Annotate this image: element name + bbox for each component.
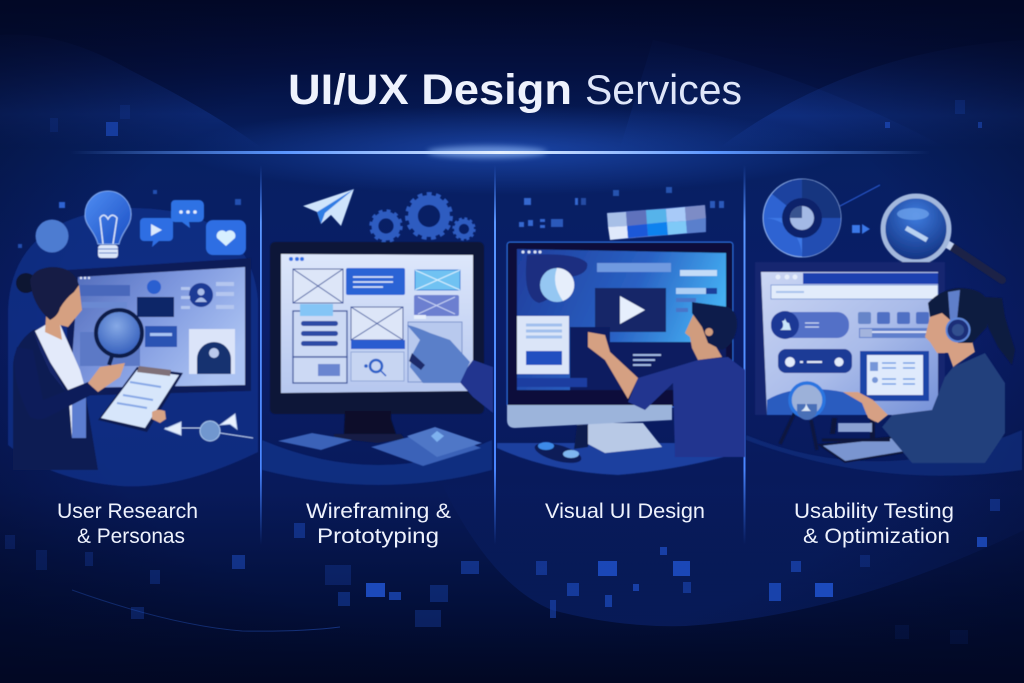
decorative squares: [519, 187, 724, 228]
desk items: [278, 433, 352, 450]
panel: user research & personas: [8, 190, 258, 486]
panel: visual ui design: [497, 187, 745, 475]
stand: [574, 425, 591, 449]
label: wireframing & prototyping: [306, 500, 451, 548]
stand: [344, 411, 396, 434]
icon: tripod magnifier: [780, 383, 824, 450]
horizontal glow line: [70, 146, 930, 158]
label: user research & personas: User Research: [57, 500, 198, 523]
desk: [497, 443, 742, 475]
desk: [262, 440, 492, 485]
icon: chat bubble: [171, 200, 204, 228]
wireframe blocks: [293, 269, 462, 383]
icon: magnifier: [883, 196, 1002, 280]
icon: light bulb: [85, 191, 131, 258]
icon: grey circle: [36, 220, 68, 252]
person: researcher: [13, 267, 125, 470]
hand pointing: [407, 325, 493, 413]
title: [288, 66, 742, 114]
title: Services: [585, 66, 742, 113]
desk: [746, 430, 1022, 476]
pixel squares decoration: [5, 100, 1000, 644]
backdrop circle: [8, 208, 258, 486]
person: tester: [843, 288, 1015, 463]
icon: gears: [371, 194, 474, 241]
title: UI/UX Design: [288, 66, 572, 114]
colour swatches: [607, 205, 706, 240]
monitor: [270, 242, 484, 443]
panel dividers: [260, 165, 746, 545]
label: usability testing & optimization: & Optimization: [803, 525, 950, 548]
clipboard: [98, 366, 183, 432]
stand: [830, 415, 875, 440]
label: wireframing & prototyping: Prototyping: [317, 525, 439, 548]
panel: wireframing & prototyping: [262, 189, 493, 485]
mouse: [533, 439, 583, 467]
play marker: [852, 224, 870, 234]
person: designer: [588, 302, 745, 457]
label: usability testing & optimization: [794, 500, 954, 548]
decorative squares: [18, 190, 241, 248]
icon: paper plane: [303, 189, 354, 226]
label: visual ui design: Visual UI Design: [545, 500, 705, 523]
label: usability testing & optimization: Usability Testing: [794, 500, 954, 523]
panel: usability testing & optimization: [746, 179, 1022, 476]
label: user research & personas: & Personas: [77, 525, 185, 548]
icon: colour wheel chart: [763, 179, 880, 257]
monitor: [755, 262, 945, 462]
monitor: [507, 242, 733, 453]
monitor: [67, 258, 251, 396]
chart arrows: [165, 414, 253, 441]
chin: [507, 405, 672, 428]
label: user research & personas: [57, 500, 198, 548]
icon: magnifier: [96, 310, 142, 365]
label: wireframing & prototyping: Wireframing &: [306, 500, 451, 523]
icon: heart card: [206, 220, 246, 255]
icon: video bubble: [140, 218, 173, 247]
